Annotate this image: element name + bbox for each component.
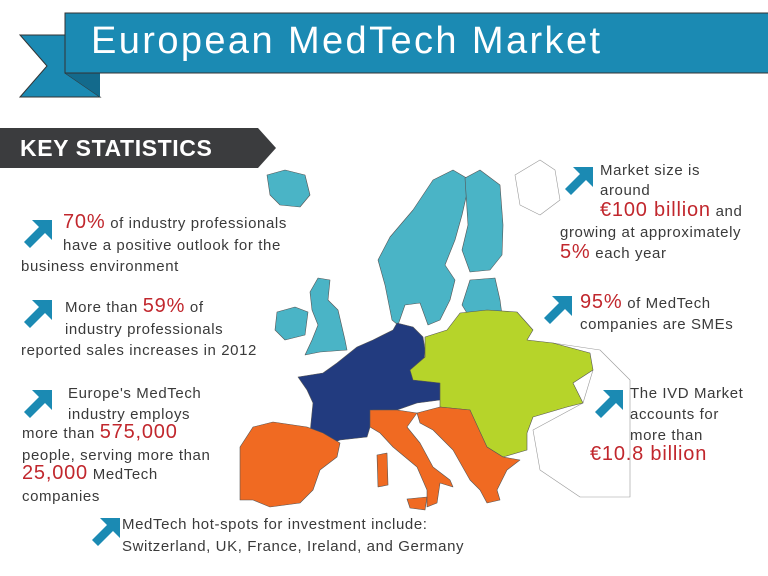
stat: market size: growing at approximately xyxy=(560,224,741,241)
map: France Germany xyxy=(298,323,440,443)
stat 1 xyxy=(21,211,287,275)
stat: SMEs xyxy=(544,291,733,333)
stat: market size: 5% each year xyxy=(560,241,667,263)
stat: IVD market: The IVD Market xyxy=(630,385,743,402)
stat 3: industry employs xyxy=(68,406,190,423)
stat: SMEs: companies are SMEs xyxy=(580,316,733,333)
stat: IVD market: more than xyxy=(630,427,703,444)
map: eastern Europe xyxy=(410,310,593,457)
stat 1: have a positive outlook for the xyxy=(63,237,281,254)
stat: IVD market xyxy=(590,385,743,465)
stat 2: More than 59% of xyxy=(65,295,204,317)
stat 4: Switzerland, UK, France, Ireland, and Germany xyxy=(122,538,464,555)
stat 3: 25,000 MedTech xyxy=(22,462,158,484)
map: east outline xyxy=(515,160,630,497)
stat: market size: around xyxy=(600,182,650,199)
stat 4: MedTech hot-spots for investment include: xyxy=(122,516,428,533)
stat 1: business environment xyxy=(21,258,179,275)
stat 3: Europe's MedTech xyxy=(68,385,201,402)
stat: market size: Market size is xyxy=(600,162,700,179)
map: southern Europe xyxy=(240,407,520,510)
stat 2: reported sales increases in 2012 xyxy=(21,342,257,359)
stat: market size xyxy=(560,162,742,263)
stat: IVD market: €10.8 billion xyxy=(590,443,707,465)
stat: market size: €100 billion and xyxy=(600,199,742,221)
stat 4 xyxy=(92,516,464,555)
title banner xyxy=(19,12,768,98)
stat 2 xyxy=(21,295,257,359)
stat 3: people, serving more than xyxy=(22,447,210,464)
key statistics bar: KEY STATISTICS xyxy=(20,135,212,161)
stat: IVD market: accounts for xyxy=(630,406,719,423)
title text: European MedTech Market xyxy=(91,20,602,62)
key statistics bar xyxy=(0,128,276,168)
stat 3: more than 575,000 xyxy=(22,421,178,443)
stat 1: 70% of industry professionals xyxy=(63,211,287,233)
map: nordic and british isles xyxy=(267,170,503,355)
stat 2: industry professionals xyxy=(65,321,223,338)
icon: arrow xyxy=(24,220,52,248)
stat 3 xyxy=(22,385,210,505)
stat 3: companies xyxy=(22,488,100,505)
stat: SMEs: 95% of MedTech xyxy=(580,291,711,313)
